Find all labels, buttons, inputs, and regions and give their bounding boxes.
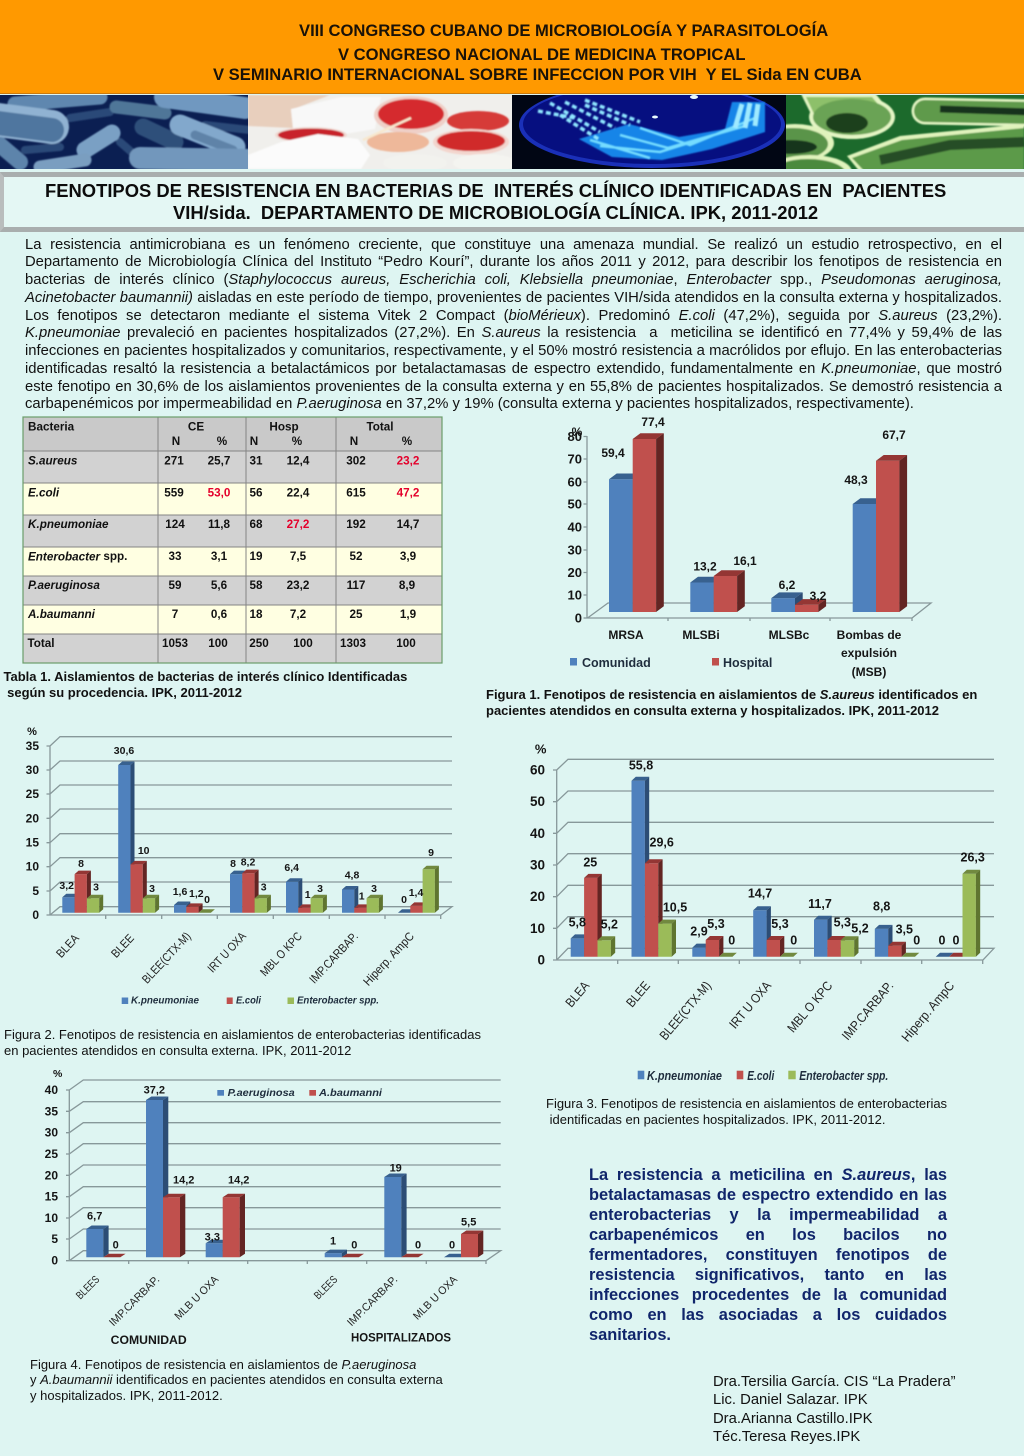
row: Total: 100 [208,637,228,650]
row: Total: 100 [293,637,313,650]
value labels: 14,2 [173,1175,194,1187]
conclusion text: infecciones procedentes de la comunidad [589,1286,947,1304]
value labels: 9 [428,847,434,859]
value labels: 3,5 [896,923,913,937]
legend: Hospital [723,656,772,670]
row: A.baumanni: 7,2 [290,608,307,621]
table header: % [217,435,228,448]
figure 2 caption: Figura 2. Fenotipos de resistencia en aislamientos de enterobacterias identificadas en pacientes atendidos en consulta externa. IPK, 2011-2012 [4,1027,481,1058]
value labels: 25 [583,855,597,869]
abstract text: Acinetobacter baumannii) aisladas en este período de tiempo, provenientes de pacientes VIH/sida atendidos en la consulta externa y hospitalizados. [25,290,1002,306]
y axis labels: 0 [51,1254,58,1268]
value labels: 8,8 [873,900,890,914]
x axis labels: IRT U OXA [726,978,774,1031]
row: Total: 1303 [340,637,366,650]
y axis labels [26,726,39,922]
y axis labels: 20 [45,1168,58,1182]
row: Total [28,637,416,650]
legend: Enterobacter spp. [297,994,379,1006]
value labels [569,759,985,948]
x axis labels: IMP.CARBAP. [839,978,896,1043]
y axis labels: 20 [530,889,545,904]
value labels: 5,5 [461,1216,476,1228]
table header: Bacteria [28,420,75,434]
row: A.baumanni: A.baumanni [27,608,96,621]
value labels: 59,4 [601,446,625,460]
group labels: COMUNIDAD [111,1333,187,1347]
x axis labels: MBL O KPC [257,929,305,979]
y axis labels: 10 [568,588,582,602]
value labels: 3,2 [59,880,74,892]
abstract text: Departamento de Microbiología Clínica del Instituto “Pedro Kourí”, durante los años 2011 y 2012, para describir los fenotipos de resistencia en [25,254,1002,270]
y axis labels: 40 [568,520,582,534]
series: K.pneumoniae [571,777,953,957]
row: K.pneumoniae: 11,8 [208,518,231,531]
row: S.aureus: 302 [346,454,366,468]
conclusion text: carbapenémicos en los bacilos no [589,1226,947,1244]
row: Enterobacter: 7,5 [290,550,307,563]
abstract text: bacterias de interés clínico (Staphylococcus aureus, Escherichia coli, Klebsiella pneumoniae, Enterobacter spp., Pseudomonas aeruginosa, [25,272,1002,288]
row: K.pneumoniae: 68 [249,518,263,531]
x axis labels: Hiperp. AmpC [360,929,417,989]
value labels: 48,3 [844,473,868,487]
authors: Dra.Tersilia García. CIS “La Pradera” Lic. Daniel Salazar. IPK Dra.Arianna Castillo.IPK Téc.Teresa Reyes.IPK [713,1374,956,1445]
value labels: 0 [351,1240,357,1252]
value labels: 5,8 [569,916,586,930]
header banner [0,0,1024,94]
conclusion text: sanitarios. [589,1326,671,1344]
row: Enterobacter: Enterobacter spp. [28,550,127,563]
y axis labels: 20 [568,565,582,580]
value labels: 3,2 [810,589,827,603]
y axis labels: 10 [530,921,545,936]
row: P.aeruginosa: 8,9 [399,579,416,592]
value labels: 8 [78,858,84,870]
row: A.baumanni [27,608,417,621]
row: E.coli [28,486,420,500]
series: Comunidad [609,474,884,612]
chart grid and axes [553,759,994,964]
value labels [59,745,434,906]
value labels: 1,6 [173,886,187,898]
figure 3 chart [530,742,996,1083]
chart grid and axes [66,1080,501,1264]
value labels: 5,3 [707,917,725,931]
value labels: 5,2 [851,922,869,936]
value labels: 16,1 [733,554,757,568]
table header: % [402,435,413,448]
row: Total: 100 [396,637,416,650]
conclusion text: resistencia significativos, tanto en las [589,1266,947,1284]
title band [0,172,1024,232]
table caption: Tabla 1. Aislamientos de bacterias de interés clínico Identificadas según su procedencia. IPK, 2011-2012 [4,669,407,700]
figure 3 caption: Figura 3. Fenotipos de resistencia en aislamientos de enterobacterias identificadas en pacientes hospitalizados. IPK, 2011-2012. [546,1096,947,1127]
row: S.aureus [28,454,420,468]
y axis labels: 40 [45,1083,58,1097]
value labels: 3 [261,882,267,894]
row: P.aeruginosa: 23,2 [287,579,310,592]
x axis labels: BLEE [108,931,137,961]
abstract text: identificadas resaltó la resistencia a betalactámicos por betalactamasas de espectro extendido, fundamentalmente en K.pneumoniae, que mostró [25,361,1002,377]
row: E.coli: 56 [249,486,263,500]
value labels: 0 [113,1240,119,1252]
x axis labels: IMP.CARBAP. [107,1274,162,1329]
y axis labels: 25 [26,787,39,801]
row: E.coli: E.coli [28,486,60,500]
y axis labels: % [535,742,547,756]
value labels: 0 [401,894,407,906]
x axis labels: IMP.CARBAP. [345,1274,400,1329]
row: K.pneumoniae: 192 [346,518,366,531]
figure 1 caption: Figura 1. Fenotipos de resistencia en aislamientos de S.aureus identificados en pacientes atendidos en consulta externa y hospitalizados. IPK, 2011-2012 [486,687,977,718]
legend: Enterobacter spp. [799,1068,888,1083]
y axis labels: 30 [45,1126,58,1140]
photo: green bacteria [786,95,1024,169]
group labels: HOSPITALIZADOS [351,1331,451,1345]
y axis labels: 20 [26,811,39,825]
y axis labels: 0 [537,952,545,968]
series: E.coli [75,861,427,913]
row: Enterobacter: 33 [168,550,182,563]
table header: Total [366,420,394,434]
value labels [601,415,906,603]
y axis labels: 5 [32,884,39,898]
y axis labels: 40 [530,826,545,841]
row: S.aureus: 25,7 [208,454,230,468]
value labels: 1,2 [189,888,204,900]
series: Enterobacter spp. [598,870,980,957]
y axis labels [530,742,547,968]
value labels: 6,2 [779,578,796,592]
value labels: 0 [939,934,946,948]
row: K.pneumoniae: 27,2 [287,518,310,531]
value labels: 1 [330,1236,336,1248]
x axis labels: BLEE [623,978,653,1010]
row: S.aureus: 12,4 [287,454,310,468]
row: E.coli: 47,2 [397,486,420,500]
value labels: 10,5 [663,901,687,915]
row: Enterobacter [28,550,417,563]
value labels: 0 [204,894,210,906]
abstract text: infecciones en pacientes hospitalizados y comunitarios, respectivamente, y el 50% mostró resistencia a macrólidos por eflujo. En las enterobacterias [25,343,1002,359]
value labels: 1 [305,889,311,901]
abstract text [24,236,1002,412]
y axis labels: % [572,425,583,439]
x axis labels: MBL O KPC [784,978,835,1035]
x axis labels [562,978,957,1045]
row: P.aeruginosa: P.aeruginosa [28,579,100,592]
legend [217,1087,383,1099]
title line 2: VIH/sida. DEPARTAMENTO DE MICROBIOLOGÍA CLÍNICA. IPK, 2011-2012 [173,202,818,223]
value labels: 37,2 [144,1085,165,1097]
congress line 2: V CONGRESO NACIONAL DE MEDICINA TROPICAL [338,45,746,64]
y axis labels: 50 [568,496,582,512]
value labels: 67,7 [882,428,906,442]
x axis labels: BLEE(CTX-M) [139,929,194,986]
table header: Hosp [269,420,299,434]
legend [122,994,379,1006]
legend: E.coli [747,1068,775,1083]
row: A.baumanni: 0,6 [211,608,228,621]
row: P.aeruginosa: 59 [168,579,182,592]
abstract text: este fenotipo en 30,6% de los aislamientos provenientes de la consulta externa y en 55,8% de pacientes hospitalizados. Se demostró resistencia a [25,378,1002,394]
group labels [111,1331,451,1347]
value labels: 6,7 [87,1211,102,1223]
table header: N [172,435,180,448]
y axis labels: 30 [26,763,39,777]
value labels: 30,6 [114,745,134,757]
abstract text: carbapenémicos por impermeabilidad en P.aeruginosa en 37,2% y 19% (consulta externa y pacientes hospitalizados, respectivamente). [25,396,914,412]
row: A.baumanni: 7 [172,608,178,621]
title line 1: FENOTIPOS DE RESISTENCIA EN BACTERIAS DE INTERÉS CLÍNICO IDENTIFICADAS EN PACIENTES [45,180,946,201]
figure 2 chart [26,726,454,1006]
row: Total: 1053 [162,637,188,650]
x axis labels: MRSA [608,628,644,642]
conclusion text: La resistencia a meticilina en S.aureus, las [589,1166,947,1184]
value labels: 0 [953,934,960,948]
row: Enterobacter: 19 [249,550,263,563]
value labels: 8,2 [241,857,255,869]
value labels: 0 [790,934,797,948]
value labels: 3,3 [205,1231,220,1243]
row: P.aeruginosa [28,579,416,592]
conclusion text: betalactamasas de espectro extendido en las [589,1186,947,1204]
photo: blue agar plate [512,95,786,169]
y axis labels: 60 [568,474,582,490]
series: K.pneumoniae [62,762,414,913]
y axis labels: 0 [32,908,39,922]
row: Total: 250 [249,637,269,650]
value labels: 14,7 [748,887,772,901]
row: S.aureus: 31 [249,454,263,468]
y axis labels: 35 [26,739,39,753]
abstract text: La resistencia antimicrobiana es un fenómeno creciente, que constituye una amenaza mundial. Se realizó un estudio retrospectivo, en el [25,236,1002,252]
legend: A.baumanni [318,1087,383,1099]
y axis labels: 10 [45,1211,58,1225]
row: S.aureus: S.aureus [28,454,78,468]
figure 4 chart [44,1068,503,1347]
value labels: 13,2 [693,560,717,574]
row: P.aeruginosa: 58 [249,579,263,592]
value labels: 3 [149,883,155,895]
value labels: 26,3 [961,850,985,864]
value labels: 5,3 [834,915,851,929]
abstract text: Los fenotipos se detectaron mediante el sistema Vitek 2 Compact (bioMérieux). Predominó E.coli (47,2%), seguida por S.aureus (23,2%). [25,308,1002,324]
value labels: 0 [449,1240,455,1252]
value labels: 14,2 [228,1175,249,1187]
series: P.aeruginosa [86,1096,466,1257]
x axis labels: Bombas de [837,628,902,642]
photo: gloved hands and petri dishes [248,95,517,172]
row: K.pneumoniae: 14,7 [397,518,419,531]
value labels: 19 [390,1162,402,1174]
x axis labels: Hiperp. AmpC [898,978,957,1045]
y axis labels: 60 [530,762,545,778]
congress line 1: VIII CONGRESO CUBANO DE MICROBIOLOGÍA Y PARASITOLOGÍA [299,21,828,40]
y axis labels: 30 [568,542,582,558]
conclusion text: como en las asociadas a los cuidados [589,1306,947,1324]
conclusion text: enterobacterias y la impermeabilidad a [589,1206,947,1224]
row: Enterobacter: 3,1 [211,550,228,563]
legend [570,656,772,670]
value labels: 11,7 [808,897,832,911]
legend: Comunidad [582,656,651,670]
y axis labels: 0 [575,610,582,626]
table header: CE [188,420,204,434]
value labels: 4,8 [345,870,359,882]
value labels: 1 [359,891,365,903]
row: S.aureus: 271 [164,454,184,468]
row: K.pneumoniae [28,518,419,531]
value labels: 10 [138,845,150,857]
row: P.aeruginosa: 5,6 [211,579,228,592]
value labels: 8 [230,858,236,870]
y axis labels [568,425,583,626]
figure 1 chart [568,415,933,679]
conclusion text: fermentadores, constituyen fenotipos de [589,1246,947,1264]
value labels: 0 [415,1240,421,1252]
value labels: 3 [317,883,323,895]
value labels: 77,4 [641,415,665,429]
value labels: 3 [93,882,99,894]
value labels: 29,6 [650,836,674,850]
x axis labels [74,1273,460,1329]
legend: P.aeruginosa [228,1087,295,1099]
photo strip [0,95,1024,169]
y axis labels: 5 [51,1232,58,1246]
row: E.coli: 559 [164,486,184,500]
row: Enterobacter: 52 [349,550,363,563]
chart axes [584,436,931,621]
x axis labels: BLEES [74,1274,102,1302]
photo: blue bacteria [0,95,252,169]
table header [28,420,413,448]
y axis labels: 15 [45,1190,58,1204]
series: A.baumanni [103,1194,483,1257]
value labels: 0 [913,934,920,948]
y axis labels: 15 [26,836,39,850]
row: A.baumanni: 25 [349,608,363,621]
row: A.baumanni: 1,9 [400,608,417,621]
table row backgrounds [23,417,442,663]
value labels: 5,2 [601,917,618,931]
row: Enterobacter: 3,9 [400,550,417,563]
series: Hospital [633,433,907,612]
row: E.coli: 53,0 [208,486,231,500]
row: E.coli: 615 [346,486,366,500]
x axis labels: IMP.CARBAP. [306,929,361,986]
congress line 3: V SEMINARIO INTERNACIONAL SOBRE INFECCION POR VIH Y EL Sida EN CUBA [213,65,862,84]
y axis labels: 70 [568,452,582,466]
x axis labels: MLB U OXA [172,1273,222,1323]
value labels: 0 [728,934,735,948]
conclusion text [589,1166,948,1344]
series: E.coli [584,859,967,957]
y axis labels [45,1068,63,1268]
x axis labels: (MSB) [852,665,886,679]
y axis labels: 25 [45,1147,58,1161]
x axis labels: BLEE(CTX-M) [656,978,714,1043]
legend [638,1068,888,1083]
value labels [87,1085,476,1252]
value labels: 6,4 [284,862,299,874]
row: E.coli: 22,4 [287,486,310,500]
table 1 [22,416,443,664]
table header: % [292,435,303,448]
legend: E.coli [236,994,262,1006]
x axis labels [608,628,902,679]
value labels: 5,3 [771,917,789,931]
value labels: 3 [371,883,377,895]
y axis labels: 10 [26,860,39,874]
y axis labels: 35 [45,1104,58,1118]
figure 4 caption: Figura 4. Fenotipos de resistencia en aislamientos de P.aeruginosa y A.baumannii identificados en pacientes atendidos en consulta externa y hospitalizados. IPK, 2011-2012. [30,1356,443,1403]
x axis labels [53,929,417,989]
value labels: 55,8 [629,759,653,773]
x axis labels: BLEA [53,931,82,961]
x axis labels: MLSBc [769,628,810,642]
row: P.aeruginosa: 117 [347,579,365,592]
table header: N [350,435,358,448]
legend: K.pneumoniae [647,1068,722,1083]
legend: K.pneumoniae [131,994,199,1006]
y axis labels: % [53,1068,63,1080]
value labels: 1,4 [409,887,423,899]
series: Enterobacter spp. [87,866,439,913]
x axis labels: IRT U OXA [205,929,249,975]
row: K.pneumoniae: K.pneumoniae [28,518,109,531]
x axis labels: BLEES [312,1274,340,1302]
table header: N [250,435,258,448]
y axis labels: 80 [568,429,582,444]
row: Total: Total [28,637,55,650]
y axis labels: % [27,726,37,738]
row: S.aureus: 23,2 [397,454,420,468]
x axis labels: expulsión [841,646,897,660]
x axis labels: MLB U OXA [411,1273,460,1323]
row: K.pneumoniae: 124 [165,518,185,531]
x axis labels: BLEA [562,978,593,1010]
row: A.baumanni: 18 [249,608,263,621]
y axis labels: 30 [530,858,545,872]
abstract text: K.pneumoniae prevaleció en pacientes hospitalizados (27,2%). En S.aureus la resistencia a meticilina se identificó en 77,4% y 59,4% de las [25,325,1002,341]
y axis labels: 50 [530,794,545,809]
value labels: 2,9 [690,925,708,939]
x axis labels: MLSBi [682,628,720,642]
chart grid and axes [46,737,452,919]
